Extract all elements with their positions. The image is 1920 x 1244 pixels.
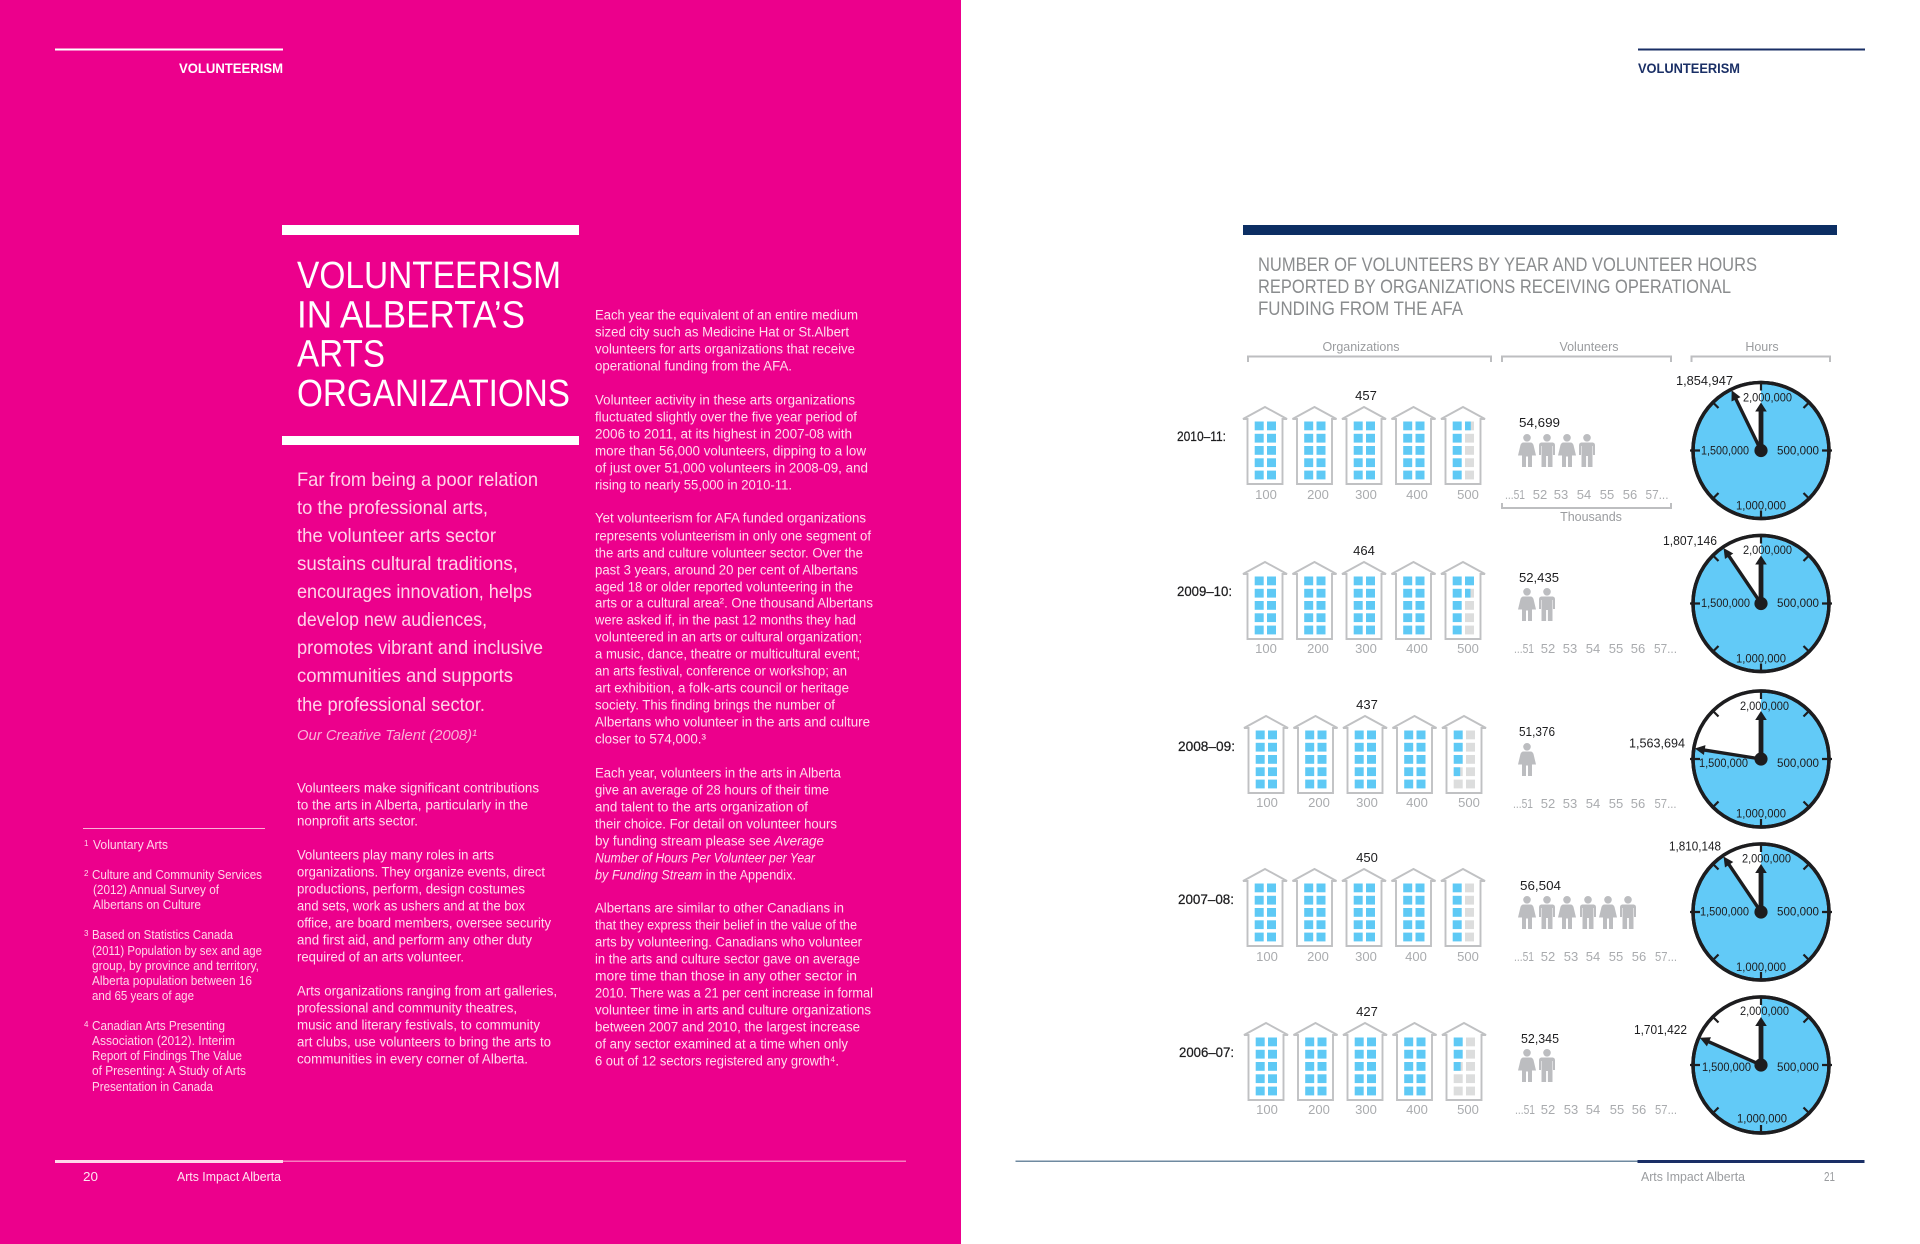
body text column 2: and talent to the arts organization of: [595, 799, 808, 814]
clock: 1,854,947 hours: 1,854,947: [1676, 373, 1733, 388]
body text column 2: by Funding Stream in the Appendix.: [595, 867, 796, 882]
volunteers: 51,376: 53: [1563, 796, 1577, 811]
body text column 2: volunteered in an arts or cultural organization;: [595, 629, 862, 644]
body text column 2: 2010. There was a 21 per cent increase in formal: [595, 985, 873, 1000]
volunteers: 56,504: 56: [1632, 949, 1646, 964]
volunteers: 56,504: 55: [1609, 949, 1623, 964]
footnotes: Based on Statistics Canada: [92, 928, 233, 942]
clock: 1,810,148 hours: 1,500,000: [1700, 904, 1749, 918]
body text column 1: Arts organizations ranging from art galleries,: [297, 983, 557, 998]
chart title: [1258, 254, 1757, 320]
buildings: 464 organizations: 500: [1457, 641, 1479, 656]
buildings: 427 organizations: 200: [1308, 1102, 1330, 1117]
left page footer: Arts Impact Alberta: [177, 1169, 282, 1184]
volunteers: 52,435: [1514, 570, 1677, 656]
buildings: 457 organizations: [1243, 388, 1485, 502]
buildings: 437 organizations: 200: [1308, 795, 1330, 810]
volunteers: 52,435: 53: [1563, 641, 1577, 656]
chart title: FUNDING FROM THE AFA: [1258, 298, 1463, 320]
year label: 2009–10:: [1177, 583, 1232, 599]
clock: 1,807,146 hours: 1,500,000: [1701, 596, 1750, 610]
year label: 2010–11:: [1177, 428, 1226, 444]
body text column 2: past 3 years, around 20 per cent of Albertans: [595, 562, 858, 577]
volunteers: 54,699: Thousands: [1560, 510, 1622, 524]
volunteers: 56,504: 53: [1564, 949, 1578, 964]
pull quote: Our Creative Talent (2008)¹: [297, 727, 477, 744]
title block: ORGANIZATIONS: [297, 373, 570, 415]
volunteers: 52,435: 56: [1631, 641, 1645, 656]
body text column 2: between 2007 and 2010, the largest increase: [595, 1019, 860, 1034]
pull quote: [297, 469, 543, 744]
clock: 1,807,146 hours: 1,807,146: [1663, 533, 1717, 548]
chart title: REPORTED BY ORGANIZATIONS RECEIVING OPERATIONAL: [1258, 276, 1731, 298]
volunteers: 52,435: 57...: [1654, 641, 1677, 656]
body text column 2: closer to 574,000.³: [595, 731, 706, 746]
clock: 1,701,422 hours: 1,000,000: [1737, 1112, 1787, 1126]
buildings: 437 organizations: 437: [1356, 697, 1378, 712]
footnotes: of Presenting: A Study of Arts: [92, 1064, 246, 1078]
buildings: 457 organizations: 200: [1307, 487, 1329, 502]
body text column 2: of just over 51,000 volunteers in 2008-09, and: [595, 460, 868, 475]
footnotes: Albertans on Culture: [93, 898, 201, 912]
footnotes: Association (2012). Interim: [92, 1034, 235, 1048]
year label: 2008–09:: [1178, 738, 1235, 754]
volunteers: 56,504: 54: [1586, 949, 1600, 964]
pull quote: promotes vibrant and inclusive: [297, 637, 543, 659]
buildings: 450 organizations: 200: [1307, 949, 1329, 964]
footnotes: 4: [84, 1020, 89, 1029]
clock: 1,701,422 hours: [1634, 996, 1832, 1134]
body text column 2: more than 56,000 volunteers, dipping to a low: [595, 443, 866, 458]
body text column 2: rising to nearly 55,000 in 2010-11.: [595, 477, 792, 492]
body text column 2: volunteers for arts organizations that receive: [595, 341, 855, 356]
body text column 2: arts by volunteering. Canadians who volunteer: [595, 934, 862, 949]
volunteers: 54,699: 57...: [1646, 487, 1668, 502]
volunteers: 56,504: 57...: [1655, 949, 1677, 964]
row: 2010-11: [1177, 373, 1832, 524]
row: 2006-07: [1179, 996, 1832, 1134]
clock: 1,854,947 hours: 1,500,000: [1701, 444, 1749, 458]
row: 2007-08: [1178, 838, 1832, 981]
left page footer: [55, 1160, 906, 1184]
volunteers: 54,699: 54: [1577, 487, 1591, 502]
volunteers: 52,345: 56: [1632, 1102, 1646, 1117]
footnotes: group, by province and territory,: [92, 959, 259, 973]
volunteers: 51,376: 55: [1609, 796, 1623, 811]
footnotes: Culture and Community Services: [92, 868, 262, 882]
volunteers: 54,699: ...51: [1505, 487, 1525, 502]
volunteers: 56,504: 52: [1541, 949, 1555, 964]
volunteers: 54,699: 53: [1554, 487, 1568, 502]
clock: 1,563,694 hours: 1,563,694: [1629, 736, 1685, 750]
body text column 2: give an average of 28 hours of their time: [595, 782, 829, 797]
pull quote: the volunteer arts sector: [297, 525, 496, 547]
clock: 1,810,148 hours: 1,000,000: [1736, 960, 1786, 974]
year label: 2007–08:: [1178, 891, 1234, 907]
body text column 1: professional and community theatres,: [297, 1000, 517, 1015]
buildings: 437 organizations: 500: [1458, 795, 1480, 810]
buildings: 450 organizations: 400: [1405, 949, 1427, 964]
body text column 2: of any sector examined at a time when only: [595, 1036, 848, 1051]
left page footer: 20: [83, 1169, 98, 1184]
clock: 1,854,947 hours: 2,000,000: [1743, 390, 1792, 404]
body text column 2: operational funding from the AFA.: [595, 358, 792, 373]
body text column 2: art exhibition, a folk-arts council or heritage: [595, 680, 849, 695]
volunteers: 54,699: [1502, 415, 1671, 524]
clock: 1,563,694 hours: 1,000,000: [1736, 806, 1786, 820]
buildings: 450 organizations: 300: [1355, 949, 1377, 964]
clock: 1,810,148 hours: 500,000: [1777, 904, 1819, 918]
clock: 1,807,146 hours: [1663, 533, 1832, 672]
title block: [282, 225, 579, 445]
column headers with brackets: Hours: [1745, 340, 1779, 354]
body text column 2: 2006 to 2011, at its highest in 2007-08 with: [595, 426, 852, 441]
clock: 1,701,422 hours: 1,701,422: [1634, 1022, 1687, 1037]
body text column 2: aged 18 or older reported volunteering in the: [595, 579, 853, 594]
body text column 2: by funding stream please see Average: [595, 833, 824, 848]
buildings: 437 organizations: 300: [1356, 795, 1378, 810]
body text column 1: office, are board members, oversee security: [297, 915, 551, 930]
body text column 1: and first aid, and perform any other duty: [297, 932, 532, 947]
body text column 2: volunteer time in arts and culture organizations: [595, 1002, 871, 1017]
buildings: 457 organizations: 500: [1457, 487, 1479, 502]
column headers with brackets: Organizations: [1322, 340, 1400, 354]
volunteers: 51,376: 56: [1631, 796, 1645, 811]
footnotes: (2012) Annual Survey of: [93, 883, 219, 897]
footnotes: 1: [84, 839, 89, 848]
buildings: 464 organizations: [1243, 543, 1485, 656]
footnotes: Alberta population between 16: [92, 974, 252, 988]
buildings: 450 organizations: 450: [1356, 850, 1378, 865]
body text column 2: were asked if, in the past 12 months they had: [594, 612, 856, 627]
clock: 1,854,947 hours: 1,000,000: [1736, 498, 1786, 512]
volunteers: 52,345: 53: [1564, 1102, 1578, 1117]
buildings: 427 organizations: 100: [1256, 1102, 1278, 1117]
body text column 1: required of an arts volunteer.: [297, 949, 464, 964]
body text column 1: and sets, work as ushers and at the box: [297, 898, 525, 913]
footnotes: Presentation in Canada: [92, 1080, 213, 1094]
buildings: 437 organizations: 100: [1256, 795, 1278, 810]
clock: 1,854,947 hours: [1676, 373, 1832, 520]
volunteers: 51,376: [1513, 724, 1676, 811]
volunteers: 51,376: 54: [1586, 796, 1600, 811]
navy bar: [1243, 225, 1837, 235]
clock: 1,563,694 hours: 1,500,000: [1699, 756, 1748, 770]
panel: pink left page: [0, 0, 961, 1244]
clock: 1,810,148 hours: 2,000,000: [1742, 852, 1791, 866]
body text column 1: to the arts in Alberta, particularly in the: [297, 797, 528, 812]
pull quote: communities and supports: [297, 665, 513, 687]
clock: 1,563,694 hours: 2,000,000: [1740, 699, 1789, 713]
buildings: 457 organizations: 100: [1255, 487, 1277, 502]
body text column 1: organizations. They organize events, direct: [297, 864, 545, 879]
footnotes: Canadian Arts Presenting: [92, 1019, 225, 1033]
volunteers: 56,504: 56,504: [1520, 878, 1561, 893]
volunteers: 56,504: ...51: [1514, 949, 1534, 964]
volunteers: 52,435: 54: [1586, 641, 1600, 656]
body text column 2: a music, dance, theatre or multicultural event;: [595, 646, 860, 661]
volunteers: 54,699: 55: [1600, 487, 1614, 502]
volunteers: 54,699: 52: [1533, 487, 1547, 502]
volunteers: 51,376: 57...: [1654, 796, 1676, 811]
body text column 2: Each year, volunteers in the arts in Alberta: [595, 765, 841, 780]
buildings: 427 organizations: 400: [1406, 1102, 1428, 1117]
buildings: 464 organizations: 200: [1307, 641, 1329, 656]
body text column 2: that they express their belief in the value of the: [595, 917, 857, 932]
buildings: 427 organizations: 500: [1457, 1102, 1479, 1117]
footnotes: Report of Findings The Value: [92, 1049, 242, 1063]
pull quote: encourages innovation, helps: [297, 581, 532, 603]
footnotes: Voluntary Arts: [93, 838, 168, 852]
title block: VOLUNTEERISM: [297, 255, 561, 297]
body text column 2: the arts and culture volunteer sector. Over the: [595, 545, 863, 560]
volunteers: 51,376: 51,376: [1519, 724, 1555, 739]
panel: white right page: [961, 0, 1920, 1244]
row: 2009-10: [1177, 533, 1832, 672]
title block: IN ALBERTA’S: [297, 294, 525, 336]
buildings: 457 organizations: 400: [1406, 487, 1428, 502]
row: 2008-09: [1178, 690, 1832, 828]
buildings: 450 organizations: 100: [1256, 949, 1278, 964]
buildings: 450 organizations: 500: [1457, 949, 1479, 964]
volunteers: 52,345: 52,345: [1521, 1031, 1559, 1046]
volunteers: 52,345: 55: [1610, 1102, 1624, 1117]
pull quote: sustains cultural traditions,: [297, 553, 518, 575]
footnotes: and 65 years of age: [92, 989, 194, 1003]
body text column 2: Each year the equivalent of an entire medium: [595, 307, 858, 322]
pull quote: to the professional arts,: [297, 497, 488, 519]
buildings: 437 organizations: [1244, 697, 1486, 810]
pull quote: the professional sector.: [297, 694, 485, 716]
volunteers: 52,435: 55: [1609, 641, 1623, 656]
body text column 2: in the arts and culture sector gave on average: [595, 951, 860, 966]
right header rule and section label: VOLUNTEERISM: [1638, 61, 1740, 76]
body text column 1: productions, perform, design costumes: [297, 881, 525, 896]
buildings: 450 organizations: [1243, 850, 1485, 964]
body text column 2: 6 out of 12 sectors registered any growth⁴.: [595, 1053, 839, 1068]
volunteers: 54,699: 54,699: [1519, 415, 1560, 430]
volunteers: 51,376: 52: [1541, 796, 1555, 811]
body text column 2: Volunteer activity in these arts organizations: [595, 392, 855, 407]
footnotes: (2011) Population by sex and age: [92, 944, 262, 958]
body text column 1: Volunteers play many roles in arts: [297, 847, 494, 862]
buildings: 464 organizations: 100: [1255, 641, 1277, 656]
clock: 1,807,146 hours: 2,000,000: [1743, 543, 1792, 557]
body text column 2: Number of Hours Per Volunteer per Year: [595, 850, 815, 865]
column headers with brackets: Volunteers: [1559, 340, 1619, 354]
body text column 2: [594, 307, 873, 1068]
footnotes: [83, 828, 265, 1094]
volunteers: 52,345: 52: [1541, 1102, 1555, 1117]
body text column 1: music and literary festivals, to community: [297, 1017, 540, 1032]
body text column 2: arts or a cultural area². One thousand Albertans: [595, 595, 873, 610]
volunteers: 56,504: [1514, 878, 1677, 964]
volunteers: 51,376: ...51: [1513, 796, 1533, 811]
body text column 1: Volunteers make significant contributions: [297, 780, 539, 795]
footnotes: 2: [84, 869, 89, 878]
body text column 1: nonprofit arts sector.: [297, 813, 418, 828]
right page footer: [1016, 1160, 1864, 1184]
body text column 2: represents volunteerism in only one segment of: [595, 528, 871, 543]
volunteers: 52,435: ...51: [1514, 641, 1534, 656]
footnotes: 3: [84, 929, 89, 938]
chart title: NUMBER OF VOLUNTEERS BY YEAR AND VOLUNTEER HOURS: [1258, 254, 1757, 276]
right page footer: Arts Impact Alberta: [1641, 1169, 1746, 1184]
right page footer: 21: [1824, 1169, 1835, 1184]
buildings: 464 organizations: 464: [1353, 543, 1375, 558]
body text column 1: art clubs, use volunteers to bring the arts to: [297, 1034, 551, 1049]
buildings: 464 organizations: 300: [1355, 641, 1377, 656]
volunteers: 52,435: 52: [1541, 641, 1555, 656]
volunteers: 52,435: 52,435: [1519, 570, 1559, 585]
buildings: 427 organizations: 427: [1356, 1004, 1378, 1019]
clock: 1,701,422 hours: 1,500,000: [1702, 1060, 1751, 1074]
volunteers: 52,345: [1515, 1031, 1677, 1117]
clock: 1,807,146 hours: 500,000: [1777, 596, 1819, 610]
title block: ARTS: [297, 334, 385, 376]
buildings: 427 organizations: 300: [1355, 1102, 1377, 1117]
buildings: 427 organizations: [1244, 1004, 1486, 1117]
body text column 1: [297, 780, 557, 1066]
body text column 2: Yet volunteerism for AFA funded organizations: [595, 510, 866, 525]
volunteers: 52,345: ...51: [1515, 1102, 1535, 1117]
buildings: 457 organizations: 457: [1355, 388, 1377, 403]
column headers with brackets: [1248, 340, 1830, 362]
buildings: 457 organizations: 300: [1355, 487, 1377, 502]
clock: 1,563,694 hours: [1629, 690, 1832, 828]
clock: 1,701,422 hours: 500,000: [1777, 1060, 1819, 1074]
pull quote: develop new audiences,: [297, 609, 487, 631]
body text column 2: Albertans who volunteer in the arts and culture: [595, 714, 870, 729]
body text column 2: more time than those in any other sector in: [595, 968, 857, 983]
clock: 1,810,148 hours: 1,810,148: [1669, 838, 1721, 854]
clock: 1,701,422 hours: 2,000,000: [1740, 1004, 1789, 1018]
body text column 2: society. This finding brings the number of: [595, 697, 835, 712]
clock: 1,807,146 hours: 1,000,000: [1736, 652, 1786, 666]
body text column 2: their choice. For detail on volunteer hours: [595, 816, 837, 831]
body text column 2: fluctuated slightly over the five year period of: [595, 409, 857, 424]
clock: 1,563,694 hours: 500,000: [1777, 756, 1819, 770]
volunteers: 54,699: 56: [1623, 487, 1637, 502]
pull quote: Far from being a poor relation: [297, 469, 538, 491]
volunteers: 52,345: 54: [1586, 1102, 1600, 1117]
body text column 1: communities in every corner of Alberta.: [297, 1051, 528, 1066]
body text column 2: Albertans are similar to other Canadians in: [595, 900, 844, 915]
buildings: 464 organizations: 400: [1406, 641, 1428, 656]
header rule and section label: VOLUNTEERISM: [179, 61, 283, 76]
year label: 2006–07:: [1179, 1044, 1234, 1060]
clock: 1,810,148 hours: [1669, 838, 1832, 981]
body text column 2: an arts festival, conference or workshop; an: [595, 663, 847, 678]
volunteers: 52,345: 57...: [1655, 1102, 1677, 1117]
clock: 1,854,947 hours: 500,000: [1777, 444, 1819, 458]
body text column 2: sized city such as Medicine Hat or St.Albert: [595, 324, 849, 339]
buildings: 437 organizations: 400: [1406, 795, 1428, 810]
